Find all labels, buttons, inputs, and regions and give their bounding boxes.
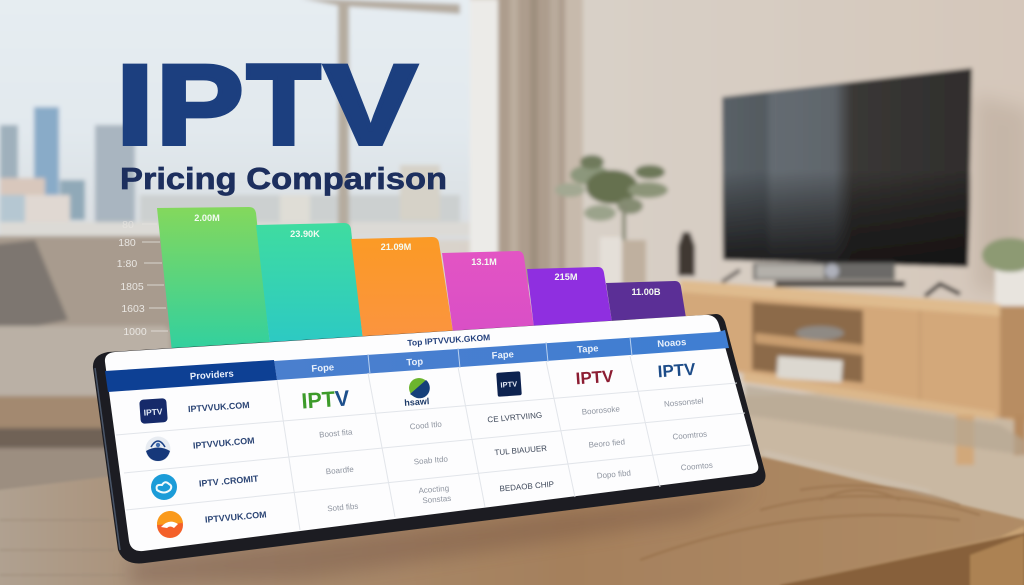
cell values: Beoro fied xyxy=(588,437,625,450)
bar: green xyxy=(157,207,270,352)
tablet shadow on table xyxy=(130,490,760,585)
floor highlight behind table xyxy=(763,450,930,494)
logo: navy IPTV badge xyxy=(496,371,522,397)
icon: dome logo xyxy=(146,436,170,462)
header row: Fope xyxy=(311,362,335,375)
title: IPTV: T xyxy=(247,42,321,169)
logo: green IPTV: IPTV xyxy=(301,385,351,414)
cell values: BEDAOB CHIP xyxy=(499,480,554,493)
bar: dark purple xyxy=(606,281,686,322)
tv cabinet xyxy=(680,280,1024,465)
header row xyxy=(105,330,729,392)
tablet body xyxy=(93,314,766,563)
cell values: Sonstas xyxy=(422,494,452,505)
logo: green circle brand xyxy=(404,378,430,408)
plant and vase xyxy=(555,155,668,287)
tv wall shadow xyxy=(975,95,1024,290)
title: IPTV: I xyxy=(116,42,154,169)
title: IPTV xyxy=(116,42,417,169)
icon: IPTV badge xyxy=(139,398,168,424)
cell values: Coomtros xyxy=(672,430,707,442)
cell values: CE LVRTVIING xyxy=(487,411,542,424)
y axis labels: 80 xyxy=(122,219,134,231)
television xyxy=(722,68,972,296)
header row: Tape xyxy=(577,343,599,356)
cell values: Dopo fibd xyxy=(596,469,631,480)
logo: navy IPTV badge: IPTV xyxy=(500,379,517,390)
bar: pink: 13.1M xyxy=(471,257,497,267)
cell values: Boardfe xyxy=(325,465,355,476)
header row: Fape xyxy=(491,349,514,362)
title: IPTV: V xyxy=(324,42,417,169)
bar: dark purple: 11.00B xyxy=(631,287,661,297)
grid lines xyxy=(116,356,750,530)
logo: red IPTV: IPTV xyxy=(575,367,615,388)
second plant xyxy=(982,238,1024,306)
cell values xyxy=(319,396,713,513)
cell values: Boost fita xyxy=(319,428,353,439)
bar: green: 2.00M xyxy=(194,213,220,223)
cabinet floor shadow xyxy=(745,385,1024,455)
cell values: Sotd fibs xyxy=(327,502,359,513)
window xyxy=(0,0,498,260)
table caption: Top IPTVVUK.GKOM xyxy=(407,332,491,348)
bottle xyxy=(678,232,695,276)
cell values: Coomtos xyxy=(680,461,713,472)
bar: teal: 23.90K xyxy=(290,229,320,239)
y axis labels: 1603 xyxy=(121,303,145,315)
y axis labels xyxy=(117,219,168,338)
tablet xyxy=(93,314,766,563)
bar: purple xyxy=(527,267,612,328)
cell values: Boorosoke xyxy=(581,404,621,417)
y axis labels: 1000 xyxy=(123,326,147,338)
bar chart xyxy=(157,207,686,352)
header row: Top xyxy=(406,356,424,369)
curtain xyxy=(498,0,583,285)
icon: orange logo xyxy=(157,511,183,538)
wooden table xyxy=(0,457,1024,585)
cell values: Soab Itdo xyxy=(413,454,449,466)
y axis labels: 180 xyxy=(118,237,136,249)
icon: IPTV badge: IPTV xyxy=(143,406,163,418)
provider name: IPTV .CROMIT xyxy=(199,473,259,489)
y axis labels: 1:80 xyxy=(117,258,137,270)
subtitle: Pricing Comparison xyxy=(120,161,447,196)
provider name: IPTVVUK.COM xyxy=(188,400,250,414)
cell values: Nossonstel xyxy=(664,396,704,409)
tablet screen xyxy=(105,315,758,551)
title: IPTV: P xyxy=(156,42,244,169)
sofa xyxy=(0,236,180,448)
cell values: Acocting xyxy=(418,484,449,495)
floor xyxy=(0,385,1024,585)
bar: purple: 215M xyxy=(555,272,578,282)
provider name: IPTVVUK.COM xyxy=(205,509,267,525)
logo: blue IPTV: IPTV xyxy=(657,360,697,381)
bar: pink xyxy=(442,251,534,332)
cell values: Cood Itlo xyxy=(409,420,443,431)
bar: teal xyxy=(256,223,363,345)
header row: Providers xyxy=(190,368,234,383)
bar: orange xyxy=(351,237,453,340)
cell values: TUL BIAUUER xyxy=(494,444,548,457)
bar: orange: 21.09M xyxy=(381,242,412,252)
icon: blue cloud xyxy=(151,474,177,500)
y axis labels: 1805 xyxy=(120,281,144,293)
logo: green circle brand: hsawl xyxy=(404,396,430,408)
header row: Noaos xyxy=(657,337,687,350)
provider name: IPTVVUK.COM xyxy=(193,435,255,451)
